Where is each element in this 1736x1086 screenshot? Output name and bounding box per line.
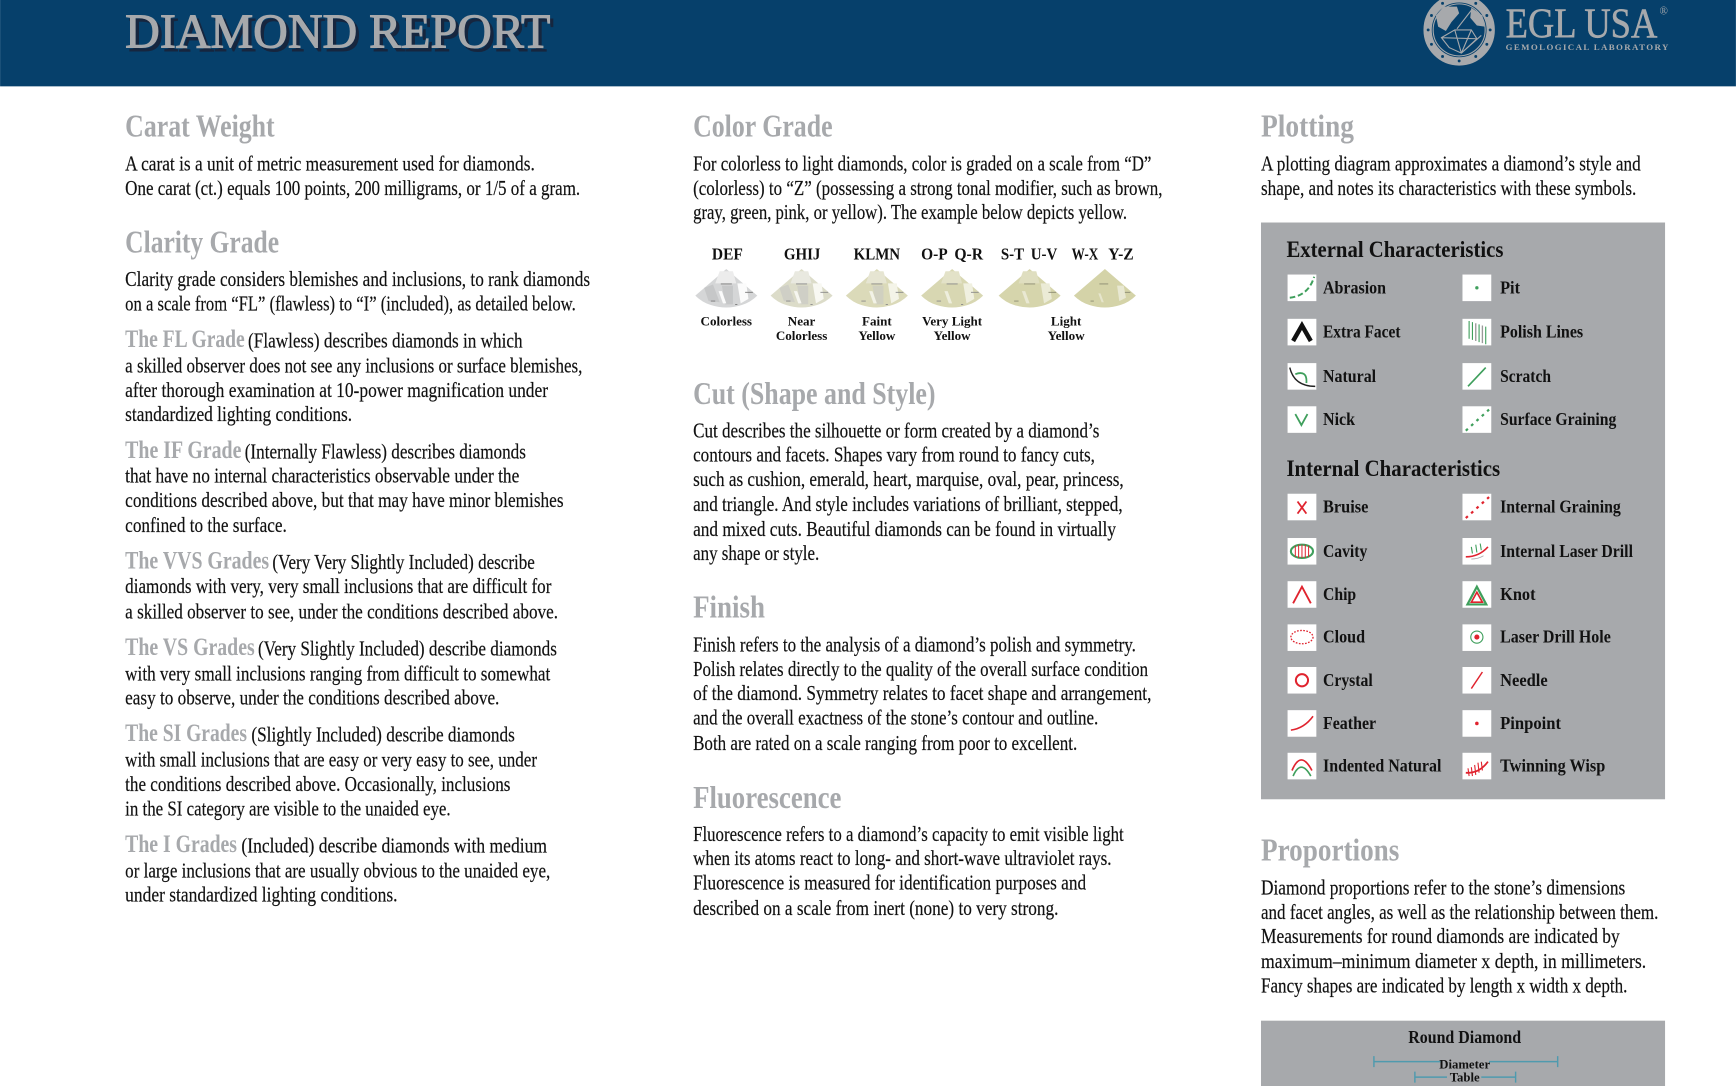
panel: plotting symbols legend <box>1261 223 1665 799</box>
text: carat description: One carat (ct.) equals 100 points, 200 milligrams, or 1/5 of a gram. <box>125 176 580 200</box>
text: fluorescence description: when its atoms react to long- and short-wave ultraviolet rays. <box>693 846 1112 870</box>
text: cut description: and mixed cuts. Beautiful diamonds can be found in virtually <box>693 517 1116 541</box>
logo: EGL USA <box>1427 0 1669 62</box>
legend: Crystal: Crystal <box>1323 670 1373 690</box>
legend: Natural: Natural <box>1323 366 1376 386</box>
text: cut description: contours and facets. Shapes vary from round to fancy cuts, <box>693 443 1095 467</box>
grade letters: W-X <box>1072 245 1098 264</box>
dimension: Table: Table <box>1450 1071 1480 1085</box>
text: VVS grades: The VVS Grades <box>125 547 269 574</box>
text: VS grades <box>125 634 557 710</box>
legend: Indented Natural <box>1288 753 1442 779</box>
text: VS grades: (Very Slightly Included) describe diamonds <box>258 636 557 660</box>
legend: Needle <box>1462 667 1548 694</box>
legend: Knot: Knot <box>1500 584 1536 604</box>
text: FL grade <box>125 326 582 426</box>
scale labels: Light <box>1051 313 1082 328</box>
text: proportions description <box>1261 875 1658 997</box>
text: VS grades: The VS Grades <box>125 634 255 661</box>
text: VVS grades: (Very Very Slightly Included) describe <box>272 550 535 574</box>
text: I grades: The I Grades <box>125 831 237 858</box>
logo: EGL USA: GEMOLOGICAL LABORATORY <box>1506 42 1669 52</box>
text: clarity description <box>125 267 590 316</box>
legend: Feather <box>1288 710 1376 737</box>
legend: Bruise: Bruise <box>1323 497 1369 517</box>
legend: Scratch <box>1462 363 1551 390</box>
text: color description <box>693 151 1162 224</box>
scale labels <box>701 313 1085 343</box>
grade letters: KLMN <box>854 245 900 264</box>
legend: Abrasion <box>1288 275 1386 301</box>
text: proportions description: Measurements for round diamonds are indicated by <box>1261 924 1620 948</box>
icon: diamond GHIJ <box>771 269 833 307</box>
legend: Abrasion: Abrasion <box>1323 277 1386 297</box>
text: cut description: any shape or style. <box>693 541 819 565</box>
dimension: Diameter: Diameter <box>1439 1057 1490 1071</box>
legend: Polish Lines: Polish Lines <box>1500 322 1583 342</box>
text: FL grade: a skilled observer does not see any inclusions or surface blemishes, <box>125 354 582 378</box>
legend: Scratch: Scratch <box>1500 366 1551 386</box>
legend: Cavity: Cavity <box>1323 541 1367 561</box>
legend: Nick <box>1288 406 1355 433</box>
panel: right column <box>1261 108 1665 1086</box>
grade letters: S-T <box>1001 245 1024 264</box>
text: FL grade: standardized lighting conditions. <box>125 402 352 426</box>
legend: Cloud <box>1288 624 1365 651</box>
legend: Chip <box>1288 581 1356 608</box>
text: fluorescence description: described on a scale from inert (none) to very strong. <box>693 896 1058 920</box>
text: SI grades: The SI Grades <box>125 720 247 747</box>
scale labels: Near <box>788 313 816 328</box>
legend: Cavity <box>1288 538 1367 565</box>
text: FL grade: (Flawless) describes diamonds in which <box>248 329 523 353</box>
text: finish description: and the overall exactness of the stone’s contour and outline. <box>693 706 1098 730</box>
text: finish description <box>693 632 1151 755</box>
dimension: Diameter <box>1374 1056 1558 1071</box>
text: SI grades <box>125 720 537 820</box>
legend: Cloud: Cloud <box>1323 627 1365 647</box>
text: SI grades: the conditions described above. Occasionally, inclusions <box>125 772 510 796</box>
title: DIAMOND REPORT <box>129 8 554 62</box>
text: I grades: (Included) describe diamonds with medium <box>241 833 548 857</box>
scale labels: Very Light <box>922 313 983 328</box>
scale labels: Yellow <box>858 328 896 343</box>
legend: Knot <box>1462 581 1536 608</box>
text: VVS grades: diamonds with very, very small inclusions that are difficult for <box>125 574 551 598</box>
grade letters: DEF <box>712 245 743 264</box>
legend: Polish Lines <box>1462 319 1583 345</box>
legend: Twinning Wisp <box>1462 753 1605 779</box>
text: finish description: Polish relates directly to the quality of the overall surface condition <box>693 657 1148 681</box>
scale labels: Colorless <box>776 328 827 343</box>
text: cut description: Cut describes the silhouette or form created by a diamond’s <box>693 418 1099 442</box>
text: I grades <box>125 831 550 907</box>
heading: Color Grade: Color Grade <box>693 108 833 144</box>
text: color description: For colorless to light diamonds, color is graded on a scale from “D” <box>693 151 1151 175</box>
text: cut description: and triangle. And style includes variations of brilliant, stepped, <box>693 492 1123 516</box>
legend: Pit <box>1462 275 1520 301</box>
text: IF grade: The IF Grade <box>125 437 241 464</box>
scale labels: Yellow <box>1048 328 1085 343</box>
grade letters: Y-Z <box>1108 245 1134 264</box>
legend: Bruise <box>1288 494 1369 520</box>
heading: Finish: Finish <box>693 589 765 625</box>
text: plotting description: shape, and notes its characteristics with these symbols. <box>1261 176 1636 200</box>
icon: diamond S-T U-V <box>999 269 1061 307</box>
title: DIAMOND REPORT <box>125 5 550 59</box>
text: cut description <box>693 418 1124 565</box>
legend: Internal Laser Drill: Internal Laser Drill <box>1500 541 1633 561</box>
scale labels: Colorless <box>701 313 752 328</box>
heading: Plotting: Plotting <box>1261 108 1354 144</box>
legend: Indented Natural: Indented Natural <box>1323 756 1442 776</box>
scale labels: Yellow <box>934 328 971 343</box>
grade letters: U-V <box>1031 245 1057 264</box>
icon: diamond O-P Q-R <box>921 269 983 307</box>
legend: Feather: Feather <box>1323 713 1376 733</box>
text: FL grade: The FL Grade <box>125 326 245 353</box>
text: VS grades: with very small inclusions ranging from difficult to somewhat <box>125 661 550 685</box>
text: color description: (colorless) to “Z” (possessing a strong tonal modifier, such as brown, <box>693 176 1162 200</box>
text: finish description: Finish refers to the analysis of a diamond’s polish and symmetry. <box>693 632 1136 656</box>
legend: Internal Graining <box>1462 494 1621 520</box>
text: carat description: A carat is a unit of metric measurement used for diamonds. <box>125 151 535 175</box>
text: finish description: of the diamond. Symmetry relates to facet shape and arrangement, <box>693 681 1151 705</box>
text: FL grade: after thorough examination at 10-power magnification under <box>125 378 548 402</box>
text: plotting description <box>1261 151 1641 200</box>
legend: Natural <box>1288 363 1376 390</box>
text: IF grade <box>125 437 564 537</box>
heading: Internal Characteristics: Internal Characteristics <box>1286 456 1500 482</box>
heading: Proportions: Proportions <box>1261 832 1399 868</box>
grade letters <box>712 245 1134 264</box>
legend: Surface Graining <box>1462 406 1616 433</box>
legend: Internal Graining: Internal Graining <box>1500 497 1621 517</box>
text: plotting description: A plotting diagram approximates a diamond’s style and <box>1261 151 1641 175</box>
legend: Pit: Pit <box>1500 277 1520 297</box>
chart: color grade scale <box>695 245 1136 343</box>
text: proportions description: Fancy shapes are indicated by length x width x depth. <box>1261 973 1627 997</box>
text: VVS grades: a skilled observer to see, under the conditions described above. <box>125 599 558 623</box>
text: VVS grades <box>125 547 558 623</box>
legend: Needle: Needle <box>1500 670 1548 690</box>
legend: Pinpoint <box>1462 710 1561 737</box>
icon: diamond KLMN <box>846 269 908 307</box>
grade letters: Q-R <box>954 245 984 264</box>
heading: Fluorescence: Fluorescence <box>693 779 841 815</box>
text: VS grades: easy to observe, under the conditions described above. <box>125 686 499 710</box>
icon: diamond W-X Y-Z <box>1074 269 1136 307</box>
legend: Twinning Wisp: Twinning Wisp <box>1500 756 1605 776</box>
text: I grades: under standardized lighting conditions. <box>125 883 398 907</box>
heading: Round Diamond: Round Diamond <box>1408 1027 1521 1047</box>
text: SI grades: with small inclusions that are easy or very easy to see, under <box>125 748 537 772</box>
panel: round diamond diagram <box>1261 1021 1665 1086</box>
text: fluorescence description: Fluorescence refers to a diamond’s capacity to emit visible light <box>693 822 1124 846</box>
legend: Surface Graining: Surface Graining <box>1500 409 1616 429</box>
heading: Clarity Grade: Clarity Grade <box>125 223 279 259</box>
legend: Nick: Nick <box>1323 409 1355 429</box>
text: IF grade: confined to the surface. <box>125 513 287 537</box>
legend: Extra Facet: Extra Facet <box>1323 322 1401 342</box>
logo: EGL USA: ® <box>1660 5 1668 17</box>
legend: Extra Facet <box>1288 319 1401 345</box>
legend: Laser Drill Hole: Laser Drill Hole <box>1500 627 1611 647</box>
text: proportions description: maximum–minimum diameter x depth, in millimeters. <box>1261 949 1646 973</box>
text: proportions description: Diamond proportions refer to the stone’s dimensions <box>1261 875 1625 899</box>
text: I grades: or large inclusions that are usually obvious to the unaided eye, <box>125 858 550 882</box>
text: SI grades: in the SI category are visible to the unaided eye. <box>125 796 451 820</box>
text: color description: gray, green, pink, or yellow). The example below depicts yellow. <box>693 200 1127 224</box>
panel: middle column <box>693 108 1162 920</box>
text: cut description: such as cushion, emerald, heart, marquise, oval, pear, princess, <box>693 467 1124 491</box>
legend: Chip: Chip <box>1323 584 1356 604</box>
legend: Internal Laser Drill <box>1462 538 1633 565</box>
text: finish description: Both are rated on a scale ranging from poor to excellent. <box>693 731 1077 755</box>
icon: diamond DEF <box>695 269 757 307</box>
text: IF grade: (Internally Flawless) describes diamonds <box>245 439 526 463</box>
panel: left column <box>125 108 590 907</box>
dimension: Table <box>1415 1071 1516 1085</box>
grade letters: O-P <box>921 245 948 264</box>
text: fluorescence description <box>693 822 1124 920</box>
grade letters: GHIJ <box>784 245 820 264</box>
text: clarity description: Clarity grade considers blemishes and inclusions, to rank diamonds <box>125 267 590 291</box>
text: IF grade: conditions described above, but that may have minor blemishes <box>125 488 564 512</box>
text: clarity description: on a scale from “FL” (flawless) to “I” (included), as detailed below. <box>125 292 576 316</box>
scale labels: Faint <box>862 313 892 328</box>
heading: Carat Weight: Carat Weight <box>125 108 275 144</box>
heading: Cut: Cut (Shape and Style) <box>693 375 936 411</box>
text: SI grades: (Slightly Included) describe diamonds <box>251 723 515 747</box>
text: IF grade: that have no internal characteristics observable under the <box>125 464 519 488</box>
legend: Pinpoint: Pinpoint <box>1500 713 1561 733</box>
legend: Laser Drill Hole <box>1462 624 1611 651</box>
text: carat description <box>125 151 580 200</box>
logo: EGL USA: EGL USA <box>1506 2 1658 48</box>
text: fluorescence description: Fluorescence is measured for identification purposes and <box>693 871 1086 895</box>
header banner <box>0 0 1736 86</box>
legend: Crystal <box>1288 667 1373 694</box>
heading: External Characteristics: External Characteristics <box>1286 237 1503 263</box>
